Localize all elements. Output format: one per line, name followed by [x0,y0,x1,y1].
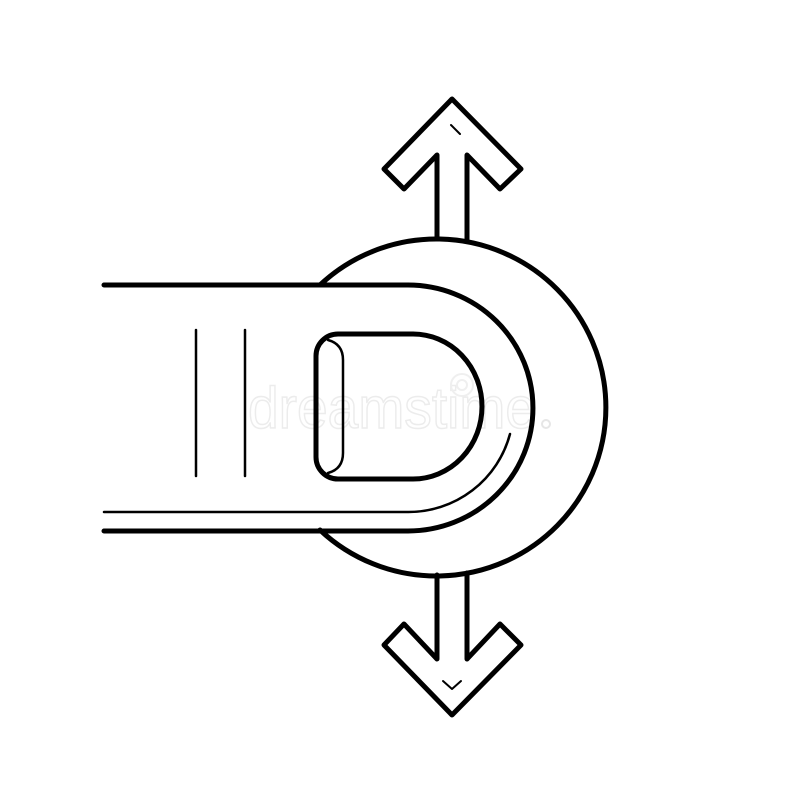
arrow: up [384,99,521,240]
finger outline [104,285,533,531]
watermark: dreamstime [248,376,536,441]
fingernail [316,334,482,479]
circle: touch area [320,239,606,576]
nail cuticle [328,340,343,473]
finger side highlight [104,434,510,512]
knuckle creases [196,330,245,476]
arrow tick: down [443,681,461,689]
arrow: down [384,573,521,715]
arrow tick: up [451,125,460,134]
